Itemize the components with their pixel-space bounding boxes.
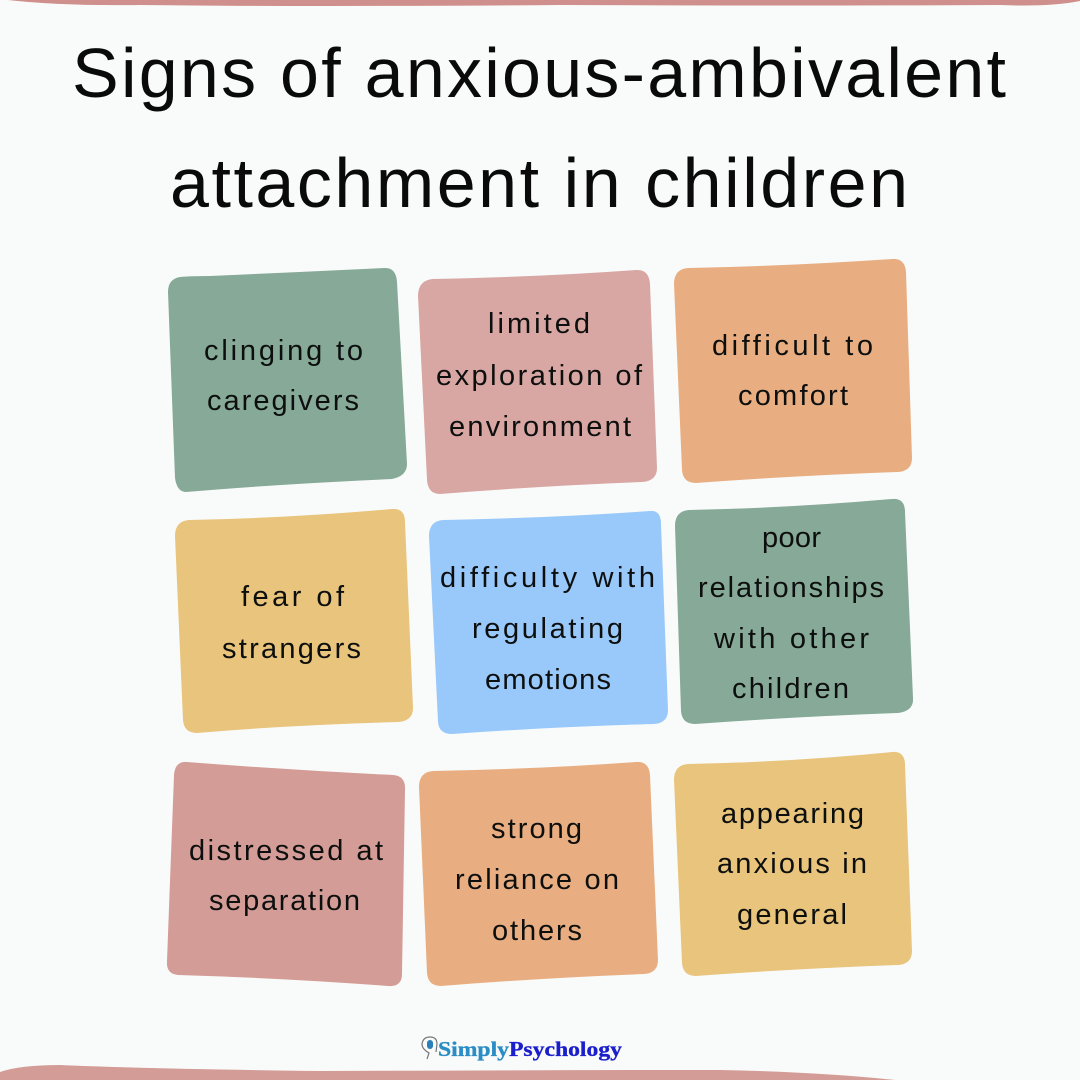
card: clinging to caregivers: clinging to (204, 335, 363, 367)
card: poor relationships with other children: children (732, 673, 849, 705)
card: strong reliance on others: others (492, 915, 582, 947)
card: poor relationships with other children (675, 499, 913, 724)
title (72, 34, 1006, 222)
card: distressed at separation (167, 762, 405, 986)
card: strong reliance on others (419, 762, 658, 986)
card: limited exploration of environment: exploration of (436, 360, 643, 392)
card: appearing anxious in general: appearing (721, 798, 864, 830)
icon: head silhouette (422, 1037, 437, 1059)
logo: Simply Psychology: Simply Psychology (438, 1037, 622, 1061)
card: distressed at separation: distressed at (189, 835, 383, 867)
card: poor relationships with other children: relationships (698, 572, 884, 604)
card: appearing anxious in general (674, 752, 912, 976)
top decorative band (8, 0, 1080, 6)
card: strong reliance on others: reliance on (455, 864, 619, 896)
title: Signs of anxious-ambivalent (72, 34, 1006, 112)
card: difficult to comfort: comfort (738, 380, 848, 412)
card: strong reliance on others: strong (491, 813, 582, 845)
card: appearing anxious in general: general (737, 899, 847, 931)
card: fear of strangers: strangers (222, 633, 361, 665)
card: difficulty with regulating emotions: difficulty with (440, 562, 655, 594)
card: clinging to caregivers (168, 268, 407, 492)
bottom decorative band (0, 1065, 895, 1080)
card: poor relationships with other children: poor (762, 522, 821, 554)
card: difficult to comfort (674, 259, 912, 483)
card: difficulty with regulating emotions: regulating (472, 613, 623, 645)
card: difficulty with regulating emotions: emotions (485, 664, 611, 696)
card: fear of strangers (175, 509, 413, 733)
card: clinging to caregivers: caregivers (207, 385, 359, 417)
title: attachment in children (170, 144, 908, 222)
card: poor relationships with other children: with other (713, 623, 869, 655)
card: difficult to comfort: difficult to (712, 330, 873, 362)
card: fear of strangers: fear of (241, 581, 345, 613)
card: difficulty with regulating emotions (429, 511, 668, 734)
card: appearing anxious in general: anxious in (717, 848, 867, 880)
card: distressed at separation: separation (209, 885, 360, 917)
card: limited exploration of environment: limited (488, 308, 590, 340)
card: limited exploration of environment (418, 270, 657, 494)
card: limited exploration of environment: environment (449, 411, 631, 443)
